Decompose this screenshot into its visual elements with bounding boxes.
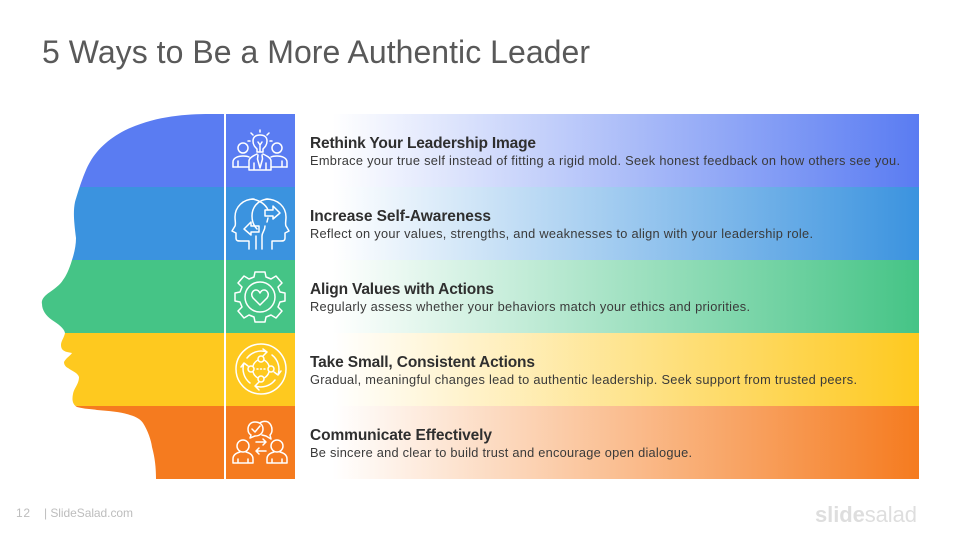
icon: gear with heart bbox=[235, 272, 285, 322]
icon: two people conversing bbox=[233, 421, 287, 463]
page number: 12 bbox=[16, 506, 30, 520]
icon: two heads with arrows bbox=[232, 199, 289, 249]
description: Gradual, meaningful changes lead to authentic leadership. Seek support from trusted peers. bbox=[310, 372, 857, 387]
title: 5 Ways to Be a More Authentic Leader bbox=[42, 34, 590, 70]
heading: Increase Self-Awareness bbox=[310, 208, 491, 225]
head silhouette bbox=[30, 114, 225, 479]
icon: leader with lightbulb bbox=[233, 130, 287, 170]
description: Embrace your true self instead of fitting a rigid mold. Seek honest feedback on how others see you. bbox=[310, 153, 900, 168]
panel: communicate effectively bbox=[226, 406, 919, 479]
description: Reflect on your values, strengths, and weaknesses to align with your leadership role. bbox=[310, 226, 813, 241]
heading: Align Values with Actions bbox=[310, 281, 494, 298]
heading: Communicate Effectively bbox=[310, 427, 492, 444]
panel: increase self-awareness bbox=[226, 187, 919, 260]
icon: circular process arrows bbox=[236, 344, 286, 394]
heading: Take Small, Consistent Actions bbox=[310, 354, 535, 371]
footer site name: | SlideSalad.com bbox=[44, 506, 133, 520]
panel: rethink your leadership image bbox=[226, 114, 919, 187]
description: Be sincere and clear to build trust and encourage open dialogue. bbox=[310, 445, 692, 460]
heading: Rethink Your Leadership Image bbox=[310, 135, 536, 152]
panel: take small, consistent actions bbox=[226, 333, 919, 406]
panel: align values with actions bbox=[226, 260, 919, 333]
logo: slidesalad bbox=[815, 502, 917, 527]
description: Regularly assess whether your behaviors match your ethics and priorities. bbox=[310, 299, 750, 314]
